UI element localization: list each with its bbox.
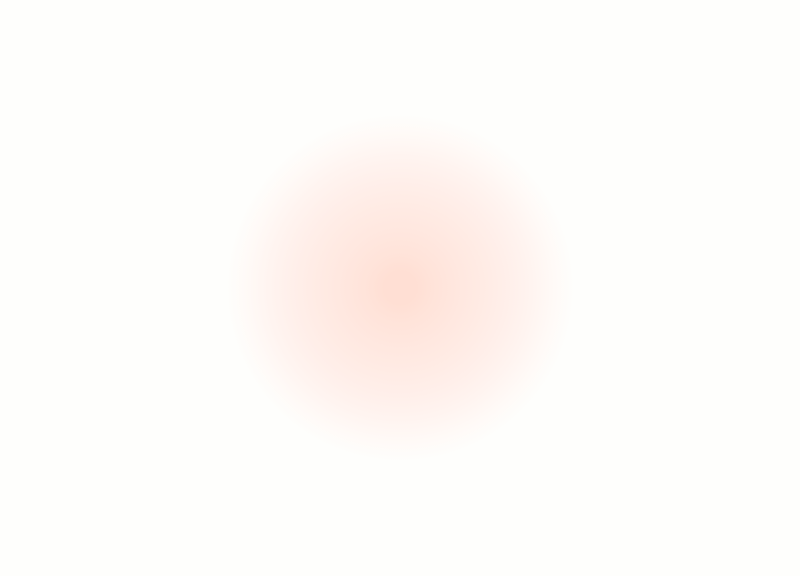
radial peach glow (220, 108, 580, 468)
